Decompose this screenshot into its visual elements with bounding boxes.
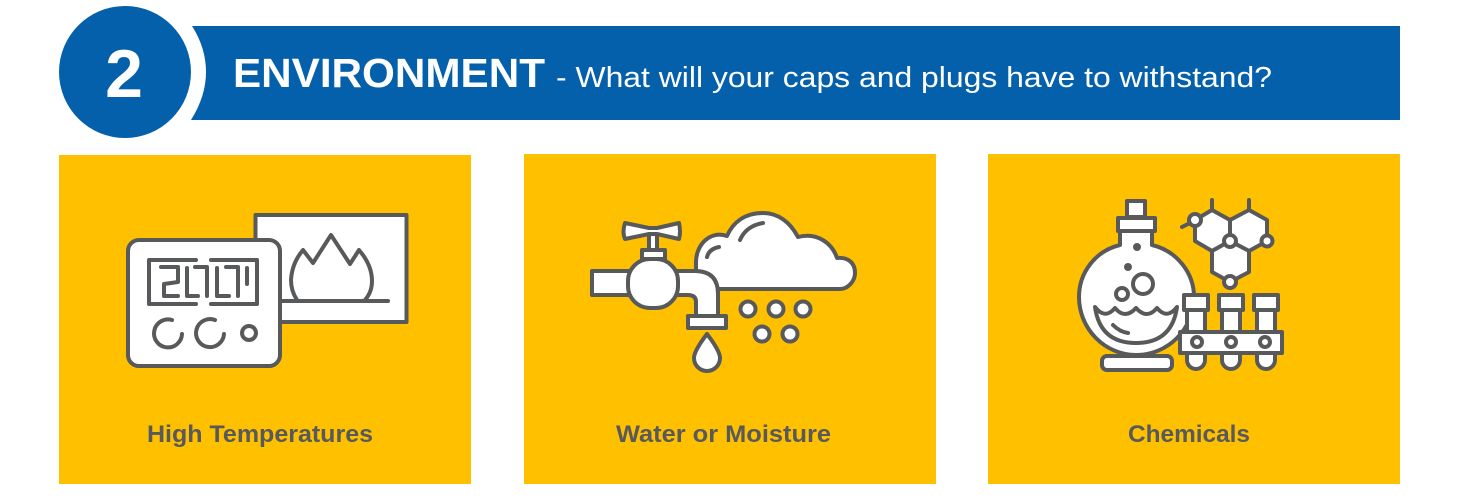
header banner [59, 6, 1400, 138]
icon: flask, molecule and test tubes [1079, 200, 1282, 370]
panel: chemicals [988, 154, 1400, 484]
icon: thermostat and flame [128, 215, 406, 366]
label: Water or Moisture [616, 421, 831, 448]
icon: tap and cloud [592, 213, 855, 371]
panel: high temperatures [59, 155, 471, 484]
number badge [59, 6, 191, 138]
number badge: 2 [105, 36, 143, 112]
heading: ENVIRONMENT [233, 50, 545, 96]
label: Chemicals [1128, 421, 1250, 448]
banner bar [191, 26, 1400, 120]
panel: water or moisture [524, 154, 936, 484]
subheading: - What will your caps and plugs have to withstand? [556, 62, 1272, 94]
label: High Temperatures [147, 421, 373, 448]
